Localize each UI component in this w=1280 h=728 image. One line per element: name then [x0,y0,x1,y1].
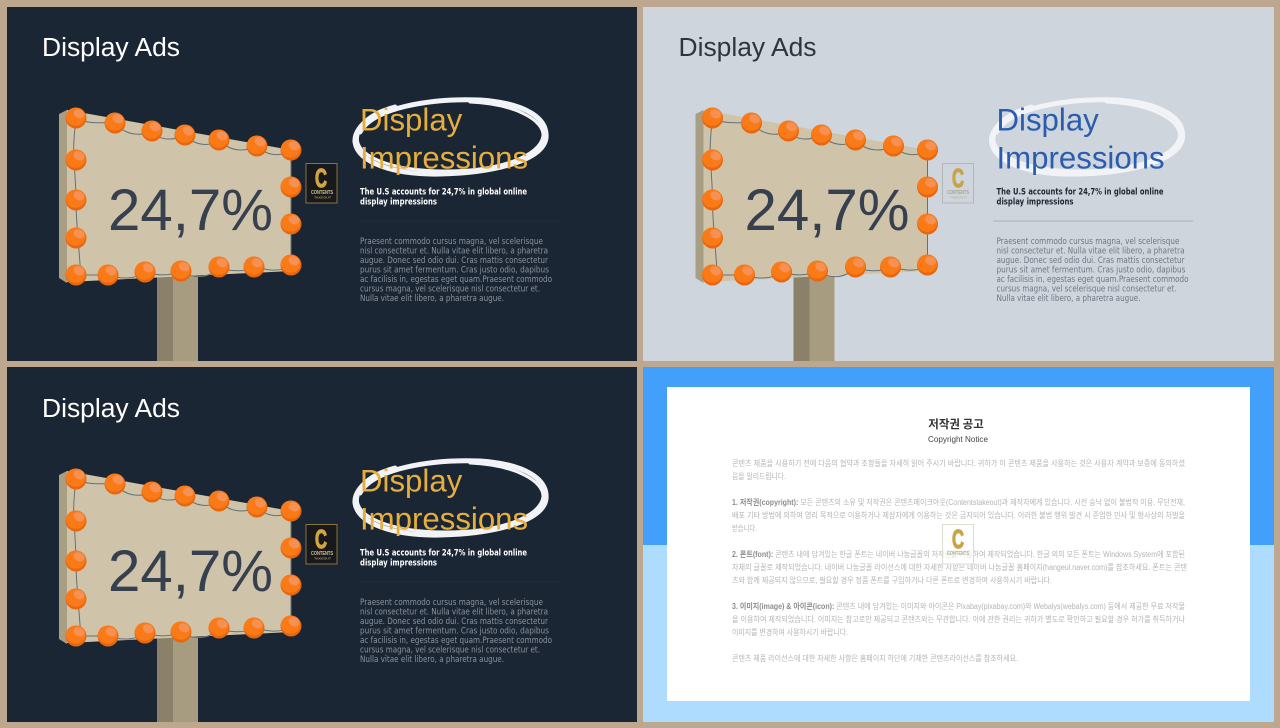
heading: Display Ads light: Display Ads [678,32,816,62]
billboard illustration [59,108,302,361]
notice body text: 3. 이미지(image) & 아이콘(icon): 콘텐츠 내에 담겨있는 이미지와 아이콘은 Pixabay(pixabay.com)와 Webalys(webalys.com) 등에서 제공한 무료 저작물 [732,601,1185,611]
heading: copyright notice: Copyright Notice [928,434,988,444]
body text: Praesent commodo cursus magna, vel scelerisque [360,237,543,247]
logo badge light: CONTENTS [947,190,970,196]
subheading: display impressions [360,198,437,208]
notice body text: 을 이용하여 제작되었습니다. 이미지는 참고로만 제공되고 콘텐츠와는 무관합니다. 이에 관한 권리는 귀하가 별도로 확인하고 필요할 경우 허가를 취득하거나 [732,614,1186,624]
notice body text: 콘텐츠 제품을 사용하기 전에 다음의 협약과 조항들을 자세히 읽어 주시기 바랍니다. 귀하가 이 콘텐츠 제품을 사용하는 것은 사용자 계약과 보증에 동의하셨 [732,458,1186,468]
subheading light [996,188,1164,208]
heading: Display Impressions bottom [360,464,528,536]
logo badge: CONTENTS [311,190,334,196]
notice body text: 1. 저작권(copyright): 모든 콘텐츠의 소유 및 저작권은 콘텐츠메이크아웃(Contentstakeout)과 제작자에게 있습니다. 사전 승낙 없이 불법적 이용, 무단전재, [732,497,1185,507]
hand-drawn ellipse light [991,100,1183,174]
logo badge on notice: C [952,524,964,554]
billboard illustration light: 24,7% [744,178,910,243]
body text bottom: cursus magna, vel scelerisque nisl consectetur et. [360,646,540,656]
logo badge bottom: CONTENTS [311,551,334,557]
heading: Display Impressions bottom: Display [360,464,463,498]
logo badge bottom [306,524,337,564]
hand-drawn ellipse [355,100,546,174]
body text light: augue. Donec sed odio dui. Cras mattis consectetur [996,256,1185,266]
body text bottom: purus sit amet fermentum. Cras justo odio, dapibus [360,626,549,636]
body text bottom: Nulla vitae elit libero, a pharetra augue. [360,655,504,665]
billboard illustration: 24,7% [108,178,273,243]
heading: copyright notice [928,416,988,444]
heading: Display Impressions [360,102,528,176]
subheading bottom [360,548,527,568]
heading: copyright notice: 저작권 공고 [928,416,984,432]
logo badge [306,163,337,203]
body text: augue. Donec sed odio dui. Cras mattis consectetur [360,256,548,266]
heading: Display Impressions: Impressions [360,140,528,176]
body text [360,237,552,304]
subheading [360,188,527,208]
logo badge bottom: TAKEOUT [314,556,331,560]
body text bottom: ac facilisis in, egestas eget quam.Praesent commodo [360,636,552,646]
body text: purus sit amet fermentum. Cras justo odio, dapibus [360,266,549,276]
panel: light slide top right [643,7,1274,361]
panel: dark slide top left [7,7,637,361]
body text light: cursus magna, vel scelerisque nisl consectetur et. [996,284,1176,294]
subheading bottom: display impressions [360,558,437,568]
body text: Nulla vitae elit libero, a pharetra augue. [360,294,504,304]
body text light: Nulla vitae elit libero, a pharetra augue. [996,294,1140,304]
heading: Display Impressions light: Display [996,102,1099,138]
notice body text: 콘텐츠 제품 라이선스에 대한 자세한 사항은 홈페이지 하단에 기재한 콘텐츠라이선스를 참조하세요. [732,653,1018,663]
panel: dark slide bottom left [7,367,637,722]
notice body text: 받습니다. [732,523,757,533]
body text light: nisl consectetur et. Nulla vitae elit libero, a pharetra [996,246,1184,256]
logo badge on notice: CONTENTS [947,551,970,557]
heading: Display Ads bottom: Display Ads [42,393,180,423]
subheading light: display impressions [996,198,1074,208]
body text light: ac facilisis in, egestas eget quam.Praesent commodo [996,275,1188,285]
notice body text [732,458,1187,663]
logo badge light: TAKEOUT [950,196,967,200]
notice body text: 자체의 글꼴로 제작되었습니다. 네이버 나눔글꼴 라이선스에 대한 자세한 사항은 네이버 나눔글꼴 홈페이지(hangeul.naver.com)를 참조하세요. 폰트는 콘텐 [732,562,1187,572]
notice body text: 츠와 함께 제공되지 않으므로, 필요할 경우 정품 폰트를 구입하거나 다른 폰트로 변경하여 사용하시기 바랍니다. [732,575,1052,585]
billboard illustration bottom: 24,7% [108,539,273,604]
billboard illustration bottom [59,468,302,722]
billboard illustration light [696,108,938,361]
subheading light: The U.S accounts for 24,7% in global online [996,188,1164,198]
heading: Display Ads: Display Ads [42,32,180,62]
hand-drawn ellipse bottom [355,461,546,535]
body text bottom [360,598,552,665]
panel: copyright notice slide [643,367,1274,722]
body text light [996,237,1188,304]
logo badge: C [315,163,327,193]
body text light: purus sit amet fermentum. Cras justo odio, dapibus [996,266,1186,276]
notice body text: 이미지를 변경하여 사용하시기 바랍니다. [732,627,848,637]
heading: Display Impressions light [996,102,1165,176]
notice body text: 2. 폰트(font): 콘텐츠 내에 담겨있는 한글 폰트는 네이버 나눔글꼴의 저작권을 기증하여 제작되었습니다. 한글 외의 모든 폰트는 Windows System에 포함된 [732,549,1185,559]
body text: ac facilisis in, egestas eget quam.Praesent commodo [360,275,552,285]
logo badge on notice [942,524,974,564]
logo badge: TAKEOUT [314,196,331,200]
logo badge light: C [952,163,964,193]
body text bottom: Praesent commodo cursus magna, vel scelerisque [360,598,543,608]
notice body text: 음을 알리드립니다. [732,471,786,481]
body text bottom: nisl consectetur et. Nulla vitae elit libero, a pharetra [360,608,548,618]
body text: cursus magna, vel scelerisque nisl consectetur et. [360,284,540,294]
heading: Display Impressions: Display [360,102,463,138]
subheading: The U.S accounts for 24,7% in global online [360,188,527,198]
logo badge light [942,163,974,203]
notice body text: 배포 기타 방법에 의하여 영리 목적으로 이용하거나 제삼자에게 이용하는 것은 금지되어 있습니다. 이러한 불법 행위 발견 시 준엄한 민사 및 형사상의 처벌을 [732,510,1185,520]
logo badge bottom: C [315,524,327,554]
subheading bottom: The U.S accounts for 24,7% in global online [360,548,527,558]
heading: Display Impressions bottom: Impressions [360,502,528,536]
body text bottom: augue. Donec sed odio dui. Cras mattis consectetur [360,617,548,627]
body text light: Praesent commodo cursus magna, vel scelerisque [996,237,1180,247]
heading: Display Impressions light: Impressions [996,140,1165,176]
body text: nisl consectetur et. Nulla vitae elit libero, a pharetra [360,246,548,256]
